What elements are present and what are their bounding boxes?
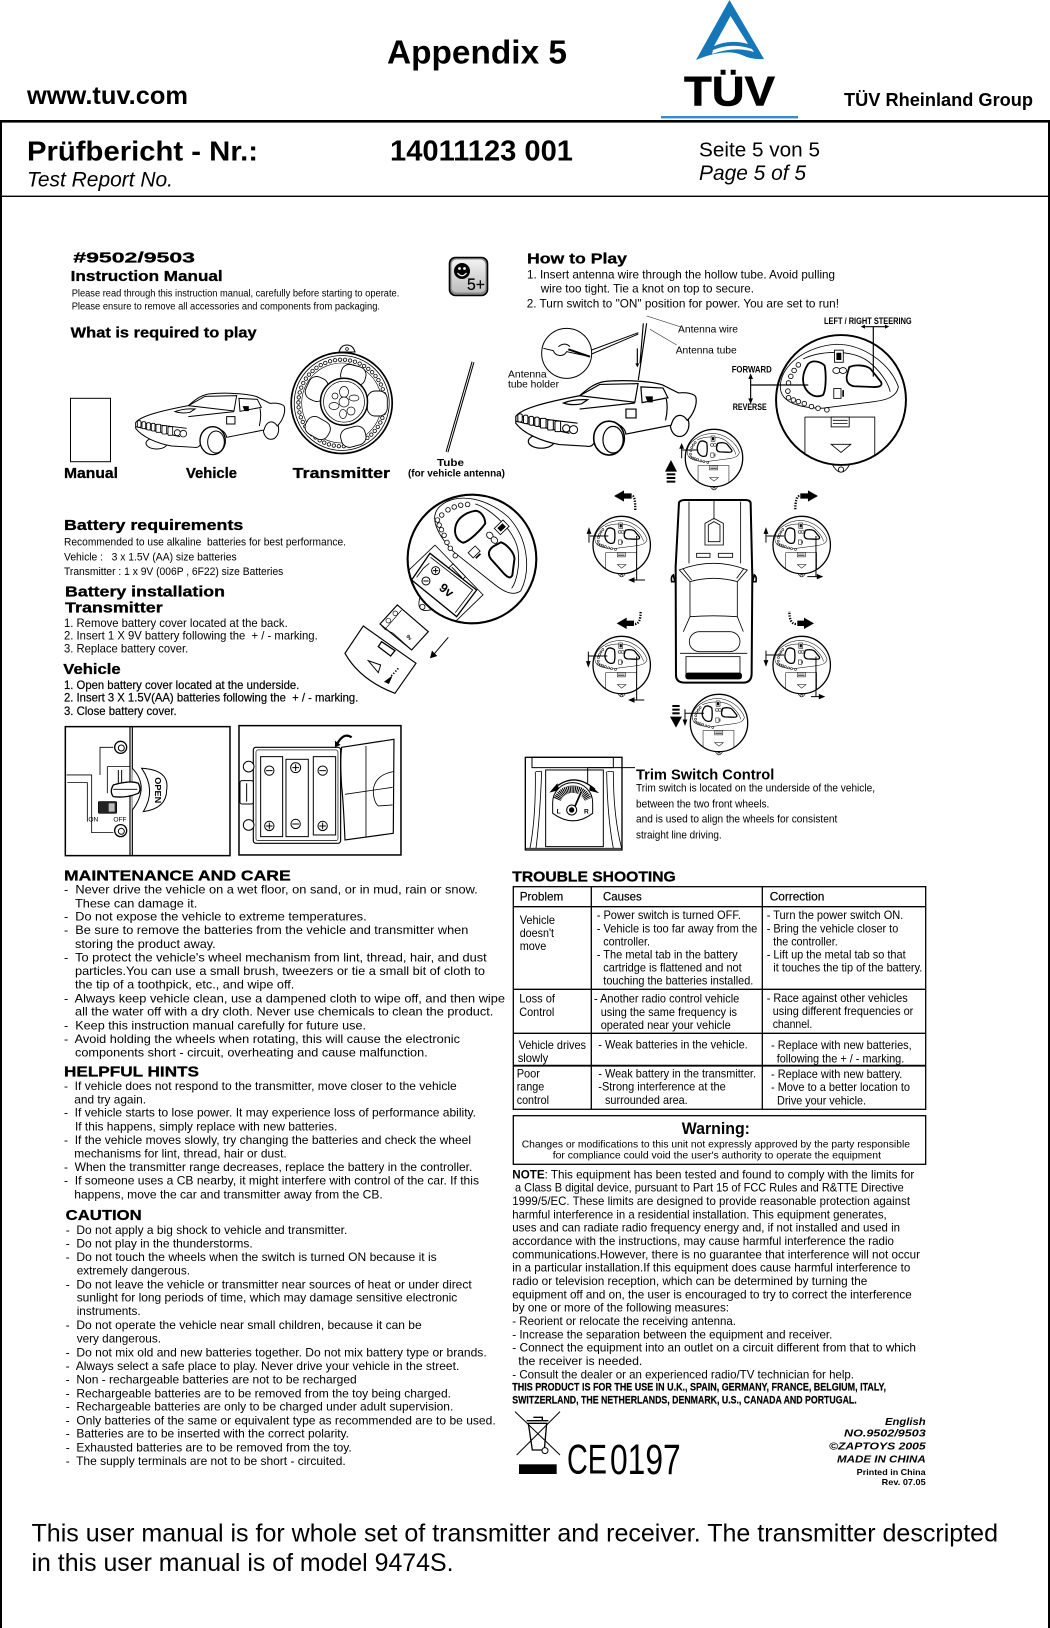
illustration: large transmitter controls: REVERSE [733, 402, 767, 413]
table: trouble shooting: range [517, 1080, 545, 1094]
table: trouble shooting: Control [519, 1005, 554, 1019]
icon: antenna tube [408, 362, 505, 480]
panel: battery requirements and installation: Vehicle : 3 x 1.5V (AA) size batteries [64, 552, 237, 564]
table: trouble shooting: -Strong interference at the [598, 1080, 726, 1094]
text block: FCC note [512, 1167, 920, 1406]
arrow: reverse right [789, 611, 814, 629]
text block: FCC note: the receiver is needed. [518, 1354, 642, 1368]
illustration: vehicle power switch box: ON [88, 817, 99, 824]
text block: FCC note: - Connect the equipment into an outlet on a circuit different from that to which [512, 1341, 916, 1355]
callout: warning box: for compliance could void the user's authority to operate the equipment [553, 1150, 881, 1162]
illustration: vehicle power switch box: OFF [113, 817, 127, 824]
panel: battery requirements and installation: Transmitter [65, 600, 163, 617]
icon: small transmitter reverse left [587, 636, 650, 702]
panel: maintenance and care: storing the product away. [75, 937, 216, 951]
panel: caution: - Non - rechargeable batteries are not to be recharged [66, 1372, 357, 1386]
illustration: vehicle power switch box: OPEN [153, 777, 163, 803]
text block: FCC note: uses and can radiate radio frequency energy and, if not installed and used in [512, 1221, 900, 1235]
table: trouble shooting: cartridge is flattened and not [603, 960, 742, 974]
table: trouble shooting: slowly [518, 1051, 548, 1065]
illustration: vehicle battery compartment box [239, 726, 401, 855]
panel: battery requirements and installation: 2. Insert 1 X 9V battery following the + / - marking. [64, 629, 318, 643]
illustration: vehicle with antenna [508, 316, 738, 455]
panel: caution: - Rechargeable batteries are to be removed from the toy being charged. [66, 1386, 451, 1400]
panel: helpful hints: HELPFUL HINTS [64, 1064, 199, 1081]
panel: battery requirements and installation: Recommended to use alkaline batteries for best performance. [64, 537, 346, 549]
text block: FCC note: in a particular installation.If this equipment does cause harmful interference to [512, 1261, 911, 1275]
panel: caution: - Do not apply a big shock to vehicle and transmitter. [66, 1223, 347, 1237]
text block: FCC note: accordance with the instructions, may cause harmful interference the radio [512, 1234, 894, 1248]
panel: caution: - Do not leave the vehicle or transmitter near sources of heat or under direct [66, 1277, 472, 1291]
callout: warning box: Warning: [682, 1119, 750, 1138]
text block: FCC note: - Consult the dealer or an experienced radio/TV technician for help. [512, 1367, 854, 1381]
panel: battery requirements and installation: 1. Remove battery cover located at the back. [64, 616, 288, 630]
panel: helpful hints: If this happens, simply replace with new batteries. [75, 1120, 337, 1134]
text block: FCC note: - Reorient or relocate the receiving antenna. [512, 1314, 736, 1328]
panel: battery requirements and installation [63, 517, 358, 718]
heading: trouble shooting: TROUBLE SHOOTING [512, 869, 676, 886]
callout: warning box [513, 1116, 926, 1164]
table: trouble shooting: - Turn the power switch ON. [767, 908, 903, 922]
illustration: transmitter battery install: 9v [436, 581, 456, 600]
illustration: large transmitter controls: FORWARD [732, 365, 772, 376]
text block: FCC note: THIS PRODUCT IS FOR THE USE IN U.K., SPAIN, GERMANY, FRANCE, BELGIUM, ITALY, [512, 1382, 886, 1394]
report number block: Test Report No. [27, 168, 173, 192]
icon: TUV logo [661, 0, 798, 118]
panel: caution: - Rechargeable batteries are only to be charged under adult supervision. [66, 1400, 453, 1414]
text block: FCC note: communications.However, there is no guarantee that interference will not occur [512, 1247, 920, 1261]
panel: battery requirements and installation: 1. Open battery cover located at the underside. [64, 678, 299, 692]
panel: caution: - Do not operate the vehicle near small children, because it can be [66, 1318, 422, 1332]
panel: maintenance and care: all the water off with a dry cloth. Never use chemicals to clean the product. [75, 1005, 493, 1019]
table: trouble shooting: doesn't [520, 926, 555, 940]
website url: www.tuv.com [26, 82, 188, 110]
text block: FCC note: by one or more of the following measures: [512, 1301, 729, 1315]
table: trouble shooting: move [520, 939, 547, 953]
panel: helpful hints [64, 1064, 479, 1201]
icon: antenna tube: Tube [437, 458, 464, 469]
illustration: vehicle with antenna: tube holder [508, 379, 559, 391]
panel: instruction manual intro: Instruction Manual [71, 268, 223, 285]
panel: maintenance and care: - Be sure to remove the batteries from the vehicle and transmitter when [64, 923, 468, 937]
table: trouble shooting: - Replace with new batteries, [771, 1038, 912, 1052]
text block: model statement: This user manual is for whole set of transmitter and receiver. The transmitter descripted [32, 1520, 998, 1548]
text block: FCC note: 1999/5/EC. These limits are designed to provide reasonable protection against [512, 1194, 911, 1208]
illustration: vehicle power switch box [65, 727, 230, 856]
table: trouble shooting: Loss of [519, 992, 556, 1006]
icon: vehicle [136, 393, 285, 482]
icon: crossed-out wheelie bin [515, 1412, 560, 1474]
text block: FCC note: radio or television reception, which can be determined by turning the [512, 1274, 868, 1288]
panel: caution: - The supply terminals are not to be short - circuited. [66, 1454, 346, 1468]
table: trouble shooting: - Weak batteries in the vehicle. [598, 1037, 748, 1051]
panel: helpful hints: and try again. [74, 1092, 146, 1106]
panel: instruction manual intro: Please ensure to remove all accessories and components from packaging. [72, 301, 380, 312]
panel: helpful hints: - If someone uses a CB nearby, it might interfere with control of the car. If this [64, 1174, 479, 1188]
icon: small transmitter forward left [587, 516, 650, 582]
table: trouble shooting: Correction [770, 890, 824, 904]
panel: caution: - Batteries are to be inserted with the correct polarity. [66, 1427, 349, 1441]
text: trim switch control [636, 767, 875, 841]
illustration: large transmitter controls [732, 316, 912, 472]
text block: FCC note: NOTE: This equipment has been tested and found to comply with the limits for [512, 1167, 914, 1181]
icon: age 5+ badge [450, 258, 488, 296]
table: trouble shooting: - The metal tab in the battery [597, 947, 738, 961]
table: trouble shooting: using the same frequency is [601, 1005, 737, 1019]
illustration: vehicle with antenna: Antenna [508, 369, 547, 381]
panel: caution [66, 1207, 496, 1468]
illustration: transmitter battery install: 9v [405, 634, 413, 642]
callout: warning box: Changes or modifications to this unit not expressly approved by the party responsible [522, 1138, 910, 1150]
panel: caution: - Do not touch the wheels when the switch is turned ON because it is [66, 1250, 437, 1264]
title: Appendix 5: Appendix 5 [387, 34, 567, 72]
table: trouble shooting: - Lift up the metal tab so that [767, 947, 906, 961]
panel: maintenance and care [64, 868, 505, 1060]
panel: helpful hints: - If vehicle does not respond to the transmitter, move closer to the vehicle [64, 1079, 457, 1093]
text block: model statement [32, 1520, 998, 1577]
panel: how to play: 1. Insert antenna wire through the hollow tube. Avoid pulling [527, 268, 835, 282]
illustration: large transmitter controls: LEFT / RIGHT STEERING [824, 316, 912, 327]
panel: how to play: How to Play [527, 250, 628, 267]
panel: battery requirements and installation: 2. Insert 3 X 1.5V(AA) batteries following the + / - marking. [64, 691, 358, 705]
arrow: reverse [670, 705, 682, 728]
panel: maintenance and care: - Avoid holding the wheels when rotating, this will cause the electronic [64, 1032, 460, 1046]
panel: caution: very dangerous. [77, 1331, 161, 1345]
text: trim switch control: and is used to align the wheels for consistent [636, 814, 837, 826]
panel: battery requirements and installation: 3. Replace battery cover. [64, 641, 188, 655]
text: trim switch control: between the two front wheels. [636, 798, 769, 810]
table: trouble shooting: - Move to a better location to [771, 1080, 910, 1094]
text: trim switch control: Trim Switch Control [636, 767, 774, 783]
panel: instruction manual intro: #9502/9503 [73, 249, 195, 266]
text block: product imprint [829, 1417, 926, 1487]
table: trouble shooting: - Power switch is turned OFF. [597, 908, 741, 922]
icon: CE 0197 mark [567, 1436, 681, 1484]
panel: battery requirements and installation: Vehicle [63, 661, 121, 678]
table: trouble shooting: Poor [517, 1066, 540, 1080]
panel: maintenance and care: the tip of a toothpick, etc., and wipe off. [75, 978, 294, 992]
panel: instruction manual intro: What is required to play [71, 324, 257, 341]
text: trim switch control: straight line driving. [636, 829, 722, 841]
table: trouble shooting: Vehicle drives [519, 1038, 586, 1052]
table: trouble shooting: controller. [603, 934, 650, 948]
group name: TÜV Rheinland Group [844, 90, 1033, 111]
panel: helpful hints: mechanisms for lint, thread, hair or dust. [74, 1146, 287, 1160]
icon: manual [64, 398, 118, 482]
text block: product imprint: Rev. 07.05 [882, 1477, 926, 1487]
text block: product imprint: English [885, 1417, 926, 1428]
panel: maintenance and care: - Always keep vehicle clean, use a dampened cloth to wipe off, and then wipe [64, 991, 505, 1005]
text block: model statement: in this user manual is of model 9474S. [32, 1549, 454, 1577]
table: trouble shooting: the controller. [773, 934, 838, 948]
report number block [27, 136, 820, 192]
illustration: vehicle top view [671, 500, 756, 683]
table: trouble shooting: - Replace with new battery. [771, 1067, 902, 1081]
table: trouble shooting: following the + / - marking. [777, 1051, 904, 1065]
panel: trim switch illustration [525, 757, 635, 850]
panel: how to play: wire too tight. Tie a knot on top to secure. [540, 282, 754, 296]
icon: CE 0197 mark: 0197 [610, 1436, 681, 1484]
panel: caution: - Do not mix old and new batteries together. Do not mix battery type or brands. [66, 1345, 487, 1359]
icon: small transmitter reverse right [764, 636, 830, 699]
illustration: transmitter battery install [345, 468, 563, 693]
table: trouble shooting: Problem [520, 890, 563, 904]
icon: transmitter back [291, 345, 392, 482]
illustration: vehicle with antenna: Antenna wire [678, 323, 738, 335]
panel: caution: - Only batteries of the same or equivalent type as recommended are to be used. [66, 1413, 496, 1427]
arrow: forward [665, 460, 677, 483]
table: trouble shooting: - Another radio control vehicle [594, 992, 740, 1006]
table: trouble shooting: touching the batteries installed. [603, 973, 753, 987]
panel: maintenance and care: - To protect the vehicle's wheel mechanism from lint, thread, hair, and dust [64, 950, 487, 964]
panel: helpful hints: happens, move the car and transmitter away from the CB. [74, 1187, 383, 1201]
text block: product imprint: Printed in China [857, 1467, 926, 1477]
icon: transmitter back: Transmitter [293, 465, 390, 482]
icon: small transmitter reverse [683, 694, 748, 755]
panel: caution: - Exhausted batteries are to be removed from the toy. [66, 1441, 352, 1455]
table: trouble shooting: - Bring the vehicle closer to [767, 921, 899, 935]
table: trouble shooting: - Race against other vehicles [767, 991, 908, 1005]
panel: caution: extremely dangerous. [77, 1263, 190, 1277]
icon: small transmitter forward [680, 429, 743, 490]
table: trouble shooting: control [517, 1093, 549, 1107]
table: trouble shooting: surrounded area. [605, 1093, 688, 1107]
icon: age 5+ badge: 5+ [467, 275, 485, 294]
panel: how to play: 2. Turn switch to "ON" position for power. You are set to run! [527, 296, 839, 310]
icon: manual: Manual [64, 465, 118, 482]
illustration: vehicle with antenna: Antenna tube [676, 344, 737, 356]
panel: instruction manual intro [71, 249, 399, 341]
panel: instruction manual intro: Please read through this instruction manual, carefully before starting to operate. [72, 289, 399, 300]
icon: small transmitter forward right [764, 516, 830, 579]
panel: maintenance and care: MAINTENANCE AND CARE [64, 868, 291, 885]
panel: battery requirements and installation: 3. Close battery cover. [64, 704, 177, 718]
panel: maintenance and care: - Do not expose the vehicle to extreme temperatures. [64, 910, 367, 924]
table: trouble shooting [513, 887, 926, 1109]
report number block: 14011123 001 [390, 136, 573, 168]
panel: battery requirements and installation: Battery installation [65, 584, 225, 601]
table: trouble shooting: - Vehicle is too far away from the [597, 921, 758, 935]
text block: FCC note: equipment off and on, the user is encouraged to try to correct the interference [512, 1287, 912, 1301]
table: trouble shooting: Drive your vehicle. [777, 1093, 866, 1107]
report number block: Prüfbericht - Nr.: [27, 136, 258, 167]
panel: caution: CAUTION [66, 1207, 142, 1224]
panel: caution: sunlight for long periods of time, which may damage sensitive electronic [77, 1291, 457, 1305]
panel: battery requirements and installation: Transmitter : 1 x 9V (006P , 6F22) size Batteries [64, 566, 284, 578]
icon: TUV logo: TÜV [684, 68, 775, 114]
panel: battery requirements and installation: Battery requirements [64, 517, 243, 534]
text block: product imprint: MADE IN CHINA [837, 1455, 926, 1466]
table: trouble shooting: using different frequencies or [773, 1004, 913, 1018]
text block: FCC note: a Class B digital device, pursuant to Part 15 of FCC Rules and R&TTE Directive [515, 1181, 904, 1195]
panel: helpful hints: - When the transmitter range decreases, replace the battery in the controller. [64, 1160, 472, 1174]
table: trouble shooting: - Weak battery in the transmitter. [598, 1066, 756, 1080]
arrow: reverse left [617, 611, 641, 629]
text: trim switch control: Trim switch is located on the underside of the vehicle, [636, 783, 875, 795]
panel: maintenance and care: - Keep this instruction manual carefully for future use. [64, 1018, 366, 1032]
text block: FCC note: harmful interference in a residential installation. This equipment generates, [512, 1207, 887, 1221]
panel: caution: - Do not play in the thunderstorms. [66, 1236, 253, 1250]
text block: product imprint: NO.9502/9503 [844, 1429, 926, 1440]
panel: helpful hints: - If the vehicle moves slowly, try changing the batteries and check the wheel [64, 1133, 471, 1147]
panel: caution: instruments. [77, 1304, 141, 1318]
table: trouble shooting: operated near your vehicle [601, 1018, 731, 1032]
panel: maintenance and care: - Never drive the vehicle on a wet floor, on sand, or in mud, rain or snow. [64, 882, 478, 896]
table: trouble shooting: channel. [773, 1017, 812, 1031]
table: trouble shooting: Vehicle [520, 913, 555, 927]
panel: maintenance and care: components short - circuit, overheating and cause malfunction. [75, 1046, 428, 1060]
arrow: forward left [614, 490, 635, 510]
panel: caution: - Always select a safe place to play. Never drive your vehicle in the street. [66, 1359, 459, 1373]
text block: product imprint: ©ZAPTOYS 2005 [829, 1441, 926, 1452]
text block: FCC note: - Increase the separation between the equipment and receiver. [512, 1327, 832, 1341]
panel: trim switch illustration: L [557, 808, 561, 815]
table: trouble shooting: Causes [603, 890, 642, 904]
icon: antenna tube: (for vehicle antenna) [408, 469, 505, 480]
report number block: Seite 5 von 5 [699, 139, 820, 162]
table: trouble shooting: it touches the tip of the battery. [773, 960, 922, 974]
icon: CE 0197 mark: CE [567, 1436, 607, 1482]
report number block: Page 5 of 5 [699, 162, 806, 185]
panel: how to play [527, 250, 839, 310]
panel: maintenance and care: particles.You can use a small brush, tweezers or tie a small bit of cloth to [75, 964, 485, 978]
icon: vehicle: Vehicle [186, 465, 237, 482]
panel: trim switch illustration: R [584, 808, 589, 815]
text block: FCC note: SWITZERLAND, THE NETHERLANDS, DENMARK, U.S., CANADA AND PORTUGAL. [512, 1394, 857, 1406]
arrow: forward right [795, 490, 818, 510]
panel: helpful hints: - If vehicle starts to lose power. It may experience loss of performance ability. [64, 1106, 476, 1120]
panel: maintenance and care: These can damage it. [75, 896, 197, 910]
